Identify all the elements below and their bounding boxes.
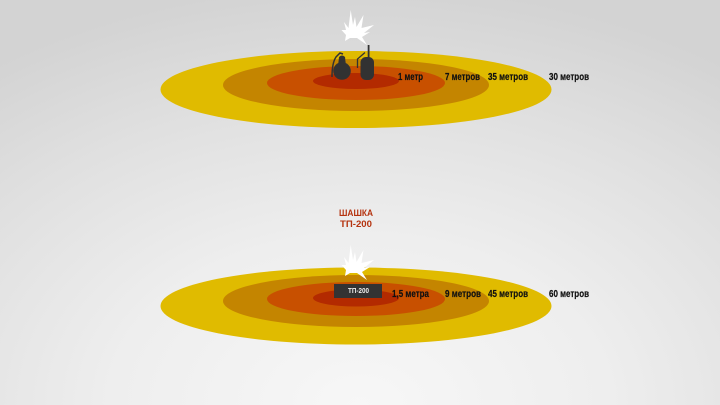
- bottom blast zones: TP-200: [160, 268, 552, 344]
- icon: top explosion flash: [342, 10, 374, 45]
- label: 60 metres: 60 метров: [549, 289, 589, 300]
- icon: stick grenade: [358, 45, 374, 80]
- TP-200 block: ТП-200: [348, 288, 369, 295]
- label: 30 metres: 30 метров: [549, 72, 589, 83]
- icon: bottom explosion flash: [342, 245, 374, 280]
- top blast zones: grenades: [160, 51, 552, 128]
- label: 9 metres: 9 метров: [445, 289, 481, 300]
- label: 7 metres: 7 метров: [445, 72, 480, 83]
- label: 1.5 metres: 1,5 метра: [392, 289, 429, 300]
- icon: round hand grenade: [332, 53, 351, 80]
- label: 35 metres: 35 метров: [488, 72, 528, 83]
- heading: TP-200 charge: [339, 208, 373, 230]
- TP-200 block: [334, 284, 382, 298]
- label: 1 metre: 1 метр: [398, 72, 423, 83]
- heading: TP-200 charge: ШАШКА: [339, 208, 373, 219]
- heading: TP-200 charge: ТП-200: [340, 219, 372, 230]
- label: 45 metres: 45 метров: [488, 289, 528, 300]
